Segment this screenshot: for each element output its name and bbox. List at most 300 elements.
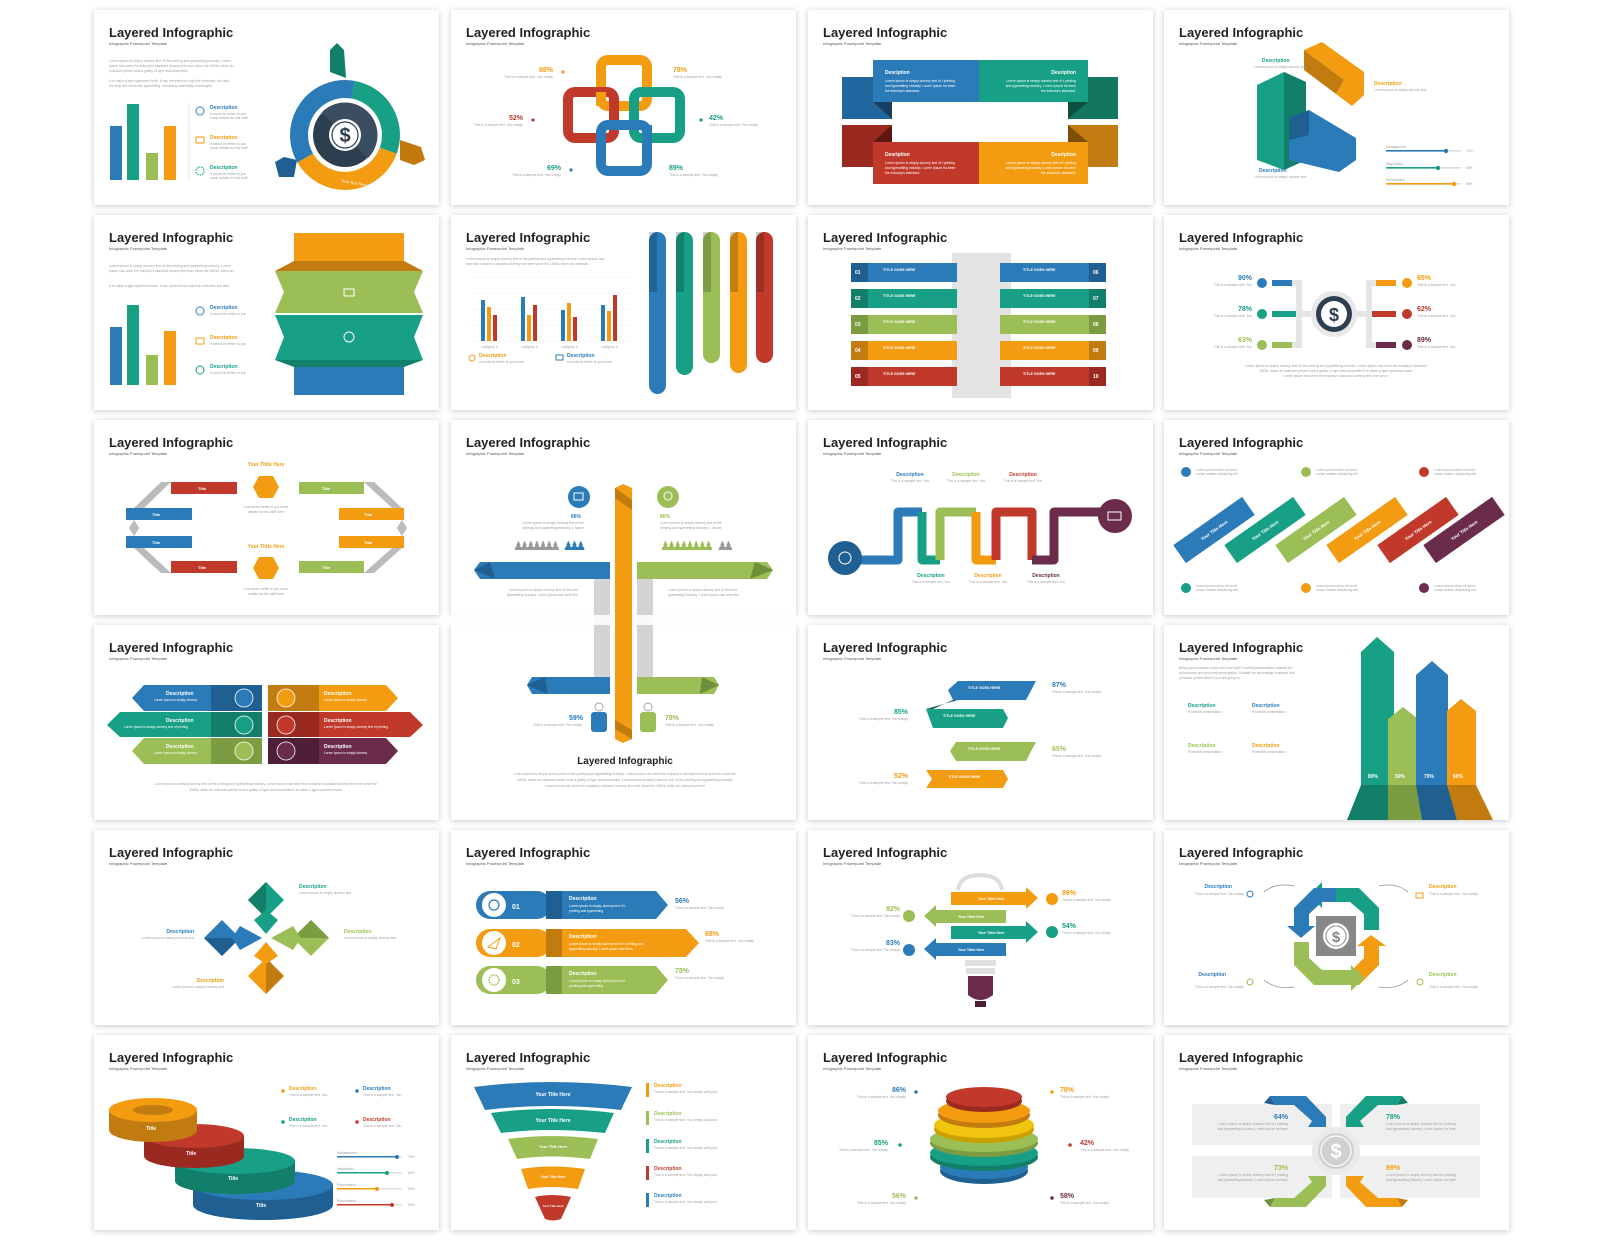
slide 16: vertical arrows: all business and personal presentation. Suitable for all strategic business and xyxy=(1179,671,1295,675)
progress bars: 70% xyxy=(408,1155,415,1159)
slide 24: four corner arrows xyxy=(1164,1035,1509,1230)
slide 13: opposing arrows: Description xyxy=(166,718,194,724)
slide 3: folded banners: the industry's standard. xyxy=(1041,89,1076,93)
slide 2: interlocking squares xyxy=(451,10,796,205)
slide 13: opposing arrows: Lorem Ipsum is simply dummy xyxy=(324,698,367,702)
slide 18: numbered bands: Lorem Ipsum is simply dummy text of t xyxy=(569,979,625,983)
slide 18: numbered bands: Layered Infographic xyxy=(466,845,590,860)
slide 11: wave ribbon: Description xyxy=(952,472,980,478)
slide 18: numbered bands: 02 xyxy=(512,942,520,949)
cross ribbons graphic spanning two slides: printing and typesetting industry. L Ipsum xyxy=(660,526,722,530)
slide 9: hexagon flow: Your Tittle Here xyxy=(248,544,285,550)
slide 17: diamond arrows xyxy=(94,830,439,1025)
slide 10: cross ribbons (top part): Infographic Powerpoint Template xyxy=(466,451,524,456)
slide 8: dollar connectors: Infographic Powerpoint Template xyxy=(1179,246,1237,251)
cross ribbons graphic spanning two slides: Lorem ipsum is simply dummy text of the printing and typesetting industry. Lorem Ipsum has been the industry's standard dummy text ever since the xyxy=(514,772,736,776)
slide 11: wave ribbon xyxy=(808,420,1153,615)
slide 23: stacked ellipses: Layered Infographic xyxy=(823,1050,947,1065)
slide 17: diamond arrows: Lorem Ipsum is simply dummy text xyxy=(299,891,351,895)
cross ribbons graphic spanning two slides: 66% xyxy=(571,514,582,520)
arrows: 70% xyxy=(1424,774,1435,780)
percentages: 69% xyxy=(547,165,562,172)
slide 18: numbered bands: Description xyxy=(569,934,597,940)
right rows: 10 xyxy=(1093,374,1099,380)
cross ribbons graphic spanning two slides: 86% xyxy=(660,514,671,520)
slide 19: bulb arrows: 54% xyxy=(1062,923,1077,930)
slide 11: wave ribbon: Description xyxy=(1009,472,1037,478)
cross ribbons graphic spanning two slides: typesetting industry. Lorem Ipsum has been the xyxy=(507,593,578,597)
slide 18: numbered bands: Lorem Ipsum is simply dummy text of t printing and xyxy=(569,942,644,946)
bar chart: Category 3 xyxy=(561,345,578,349)
slide 9: hexagon flow: Title xyxy=(152,540,161,545)
slide 12: diagonal bars xyxy=(1164,420,1509,615)
percentages: 42% xyxy=(709,115,724,122)
percentages: This is a sample text. You simply xyxy=(669,173,718,177)
slide 12: diagonal bars: Your Title Here xyxy=(1302,519,1331,542)
slide 24: four corner arrows: Lorem Ipsum is simply dummy text of t printing xyxy=(1386,1122,1456,1126)
slide 22: funnel: Your Title Here xyxy=(541,1175,565,1179)
slide 20: square cycle: Infographic Powerpoint Template xyxy=(1179,861,1237,866)
slide 9: hexagon flow: It would be better to put some xyxy=(244,587,288,591)
slide 21: stacked discs: Title xyxy=(146,1126,156,1132)
slide 3: folded banners: Lorem Ipsum is simply dummy text of t printing xyxy=(1006,79,1076,83)
slide 19: bulb arrows: This is a sample text. You simply xyxy=(1062,931,1111,935)
slide 24: four corner arrows: and typesetting industry. Lorem Ipsum ha been xyxy=(1218,1178,1288,1182)
slide 11: wave ribbon: Infographic Powerpoint Template xyxy=(823,451,881,456)
slide 8: dollar connectors: 1500s, when an unknown printer took a galley of type and scrambled it to make a type specimen book. xyxy=(1259,369,1413,373)
slide 24: four corner arrows: Infographic Powerpoint Template xyxy=(1179,1066,1237,1071)
layered stack xyxy=(275,233,423,395)
slide 19: bulb arrows: Your Tittle Here xyxy=(978,931,1004,935)
cross ribbons graphic spanning two slides: Lorem Ipsum is simply dummy text of the xyxy=(522,521,584,525)
slide 20: square cycle: Description xyxy=(1198,972,1226,978)
slide 20: square cycle: Description xyxy=(1204,884,1232,890)
cross ribbons graphic spanning two slides: Lorem Ipsum is simply dummy text of the print xyxy=(668,588,737,592)
arrows: 50% xyxy=(1395,774,1406,780)
slide 9: hexagon flow: Your Tittle Here xyxy=(248,462,285,468)
descriptions: Description xyxy=(210,105,238,111)
slide 21: stacked discs: Description xyxy=(289,1117,317,1123)
percentages: 89% xyxy=(669,165,684,172)
slide 5: stacked layers: Ipsum has been the industry's standard dummy text ever since the 1500s, when an xyxy=(109,269,234,273)
slide 22: funnel: Your Title Here xyxy=(535,1118,571,1124)
progress bars: 60% xyxy=(408,1171,415,1175)
slide 7: title rows: Infographic Powerpoint Template xyxy=(823,246,881,251)
ring chart: $ xyxy=(339,125,351,147)
slide 24: four corner arrows: and typesetting industry. Lorem Ipsum ha been xyxy=(1218,1127,1288,1131)
slide 12: diagonal bars: Lorem ipsum dolor sit amet, xyxy=(1196,468,1238,472)
slide 13: opposing arrows: Description xyxy=(324,744,352,750)
slide 19: bulb arrows: Your Tittle Here xyxy=(958,948,984,952)
slide 17: diamond arrows: Description xyxy=(166,929,194,935)
left rows: 04 xyxy=(855,348,861,354)
slide 21: stacked discs: Title xyxy=(256,1203,266,1209)
slide 5: stacked layers: Description xyxy=(210,364,238,370)
slide 19: bulb arrows: Your Tittle Here xyxy=(958,915,984,919)
slide 21: stacked discs: Layered Infographic xyxy=(109,1050,233,1065)
progress bars xyxy=(337,1151,415,1207)
progress bars: 90% xyxy=(408,1203,415,1207)
slide 18: numbered bands: Description xyxy=(569,971,597,977)
slide 5: stacked layers: Lorem Ipsum is simply dummy text of the printing and typesetting industry. Lorem xyxy=(109,264,231,268)
slide 13: opposing arrows: Lorem Ipsum is simply dummy xyxy=(154,698,197,702)
slide 3: folded banners: the industry's standard. xyxy=(1041,171,1076,175)
percentages: This is a sample text. You simply xyxy=(709,123,758,127)
right rows: TITLE GOES HERE xyxy=(1023,346,1056,350)
slide 13: opposing arrows: Description xyxy=(166,744,194,750)
slide 8: dollar connectors: 90% xyxy=(1238,275,1253,282)
slide 21: stacked discs: This is a sample text. You xyxy=(289,1093,328,1097)
left rows: 03 xyxy=(855,322,861,328)
slide 18: numbered bands: 03 xyxy=(512,979,520,986)
slide 7: title rows: Layered Infographic xyxy=(823,230,947,245)
slide 8: dollar connectors: Lorem Ipsum has been the industry's standard dummy text ever since. xyxy=(1283,374,1389,378)
slide 20: square cycle: This is a sample text. You simply xyxy=(1195,985,1244,989)
cross ribbons graphic spanning two slides: 78% xyxy=(665,715,680,722)
ring chart xyxy=(275,43,425,188)
slide 21: stacked discs: Title xyxy=(228,1176,238,1182)
slide 15: stair ribbons: Layered Infographic xyxy=(823,640,947,655)
slide 12: diagonal bars: Lorem ipsum dolor sit amet, xyxy=(1316,584,1358,588)
slide 11: wave ribbon: Description xyxy=(896,472,924,478)
descriptions: It would be better to put xyxy=(210,142,245,146)
slide 8: dollar connectors: $ xyxy=(1329,305,1339,325)
slide 9: hexagon flow: Title xyxy=(322,486,331,491)
bar chart xyxy=(110,104,176,180)
slide 11: wave ribbon: Description xyxy=(974,573,1002,579)
slide 23: stacked ellipses: 58% xyxy=(1060,1193,1075,1200)
slide 16: vertical arrows: Description xyxy=(1188,743,1216,749)
cross ribbons graphic spanning two slides: ♟♟♟ xyxy=(563,539,584,553)
slide 22: funnel: Your Title Here xyxy=(542,1204,564,1208)
slide 12: diagonal bars: Your Title Here xyxy=(1251,519,1280,542)
progress bars: Presentation xyxy=(337,1183,356,1187)
slide 11: wave ribbon: This is a sample text. You xyxy=(1004,479,1042,483)
slide 11: wave ribbon: This is a sample text. You xyxy=(891,479,929,483)
slide 5: stacked layers: Infographic Powerpoint Template xyxy=(109,246,167,251)
slide 8: dollar connectors: Lorem ipsum is simply dummy text of the printing and typesetting industry. Lorem Ipsum has been the industry's standard xyxy=(1245,364,1427,368)
slide 19: bulb arrows: 83% xyxy=(886,940,901,947)
slide 16: vertical arrows xyxy=(1164,625,1509,820)
slide 13: opposing arrows: Lorem Ipsum is simply dummy text of printing xyxy=(124,725,188,729)
cross ribbons graphic spanning two slides: typesetting industry. Lorem Ipsum has been the xyxy=(668,593,739,597)
slide 6: chart + vertical pills: been the industry's standard dummy text ever since the 1500s, when an unknown. xyxy=(466,262,589,266)
descriptions: It would be better to put xyxy=(210,172,245,176)
slide 22: funnel: Description xyxy=(654,1111,682,1117)
slide 22: funnel xyxy=(451,1035,796,1230)
slide 23: stacked ellipses: This is a sample text. You simply xyxy=(1060,1095,1109,1099)
progress bars: Presentation xyxy=(337,1199,356,1203)
cross ribbons graphic spanning two slides: Lorem Ipsum is simply dummy text of the xyxy=(660,521,722,525)
slide 9: hexagon flow: Title xyxy=(198,565,207,570)
slide 19: bulb arrows: Your Tittle Here xyxy=(978,897,1004,901)
slide 18: numbered bands: printing and typesetting xyxy=(569,909,603,913)
slide 22: funnel: This is a sample text. You simply add your xyxy=(654,1146,718,1150)
slide 4: 3D arrows with progress: Description xyxy=(1374,81,1402,87)
slide 18: numbered bands: 78% xyxy=(675,968,690,975)
bar chart: Category 2 xyxy=(521,345,538,349)
slide 19: bulb arrows: This is a sample text. You simply xyxy=(1062,898,1111,902)
slide 8: dollar connectors: This is a sample text. You xyxy=(1417,345,1456,349)
slide 1: circular dollar xyxy=(94,10,439,205)
slide 22: funnel: This is a sample text. You simply add your xyxy=(654,1090,718,1094)
slide 5: stacked layers: It would be better to put xyxy=(210,371,245,375)
slide 13: opposing arrows: Infographic Powerpoint Template xyxy=(109,656,167,661)
cross ribbons graphic spanning two slides: This is a sample text. You simply xyxy=(533,723,582,727)
slide 23: stacked ellipses: Infographic Powerpoint Template xyxy=(823,1066,881,1071)
slide 20: square cycle: Description xyxy=(1429,972,1457,978)
slide 5: stacked layers: Description xyxy=(210,305,238,311)
slide 8: dollar connectors: 63% xyxy=(1238,337,1253,344)
left rows: TITLE GOES HERE xyxy=(883,268,916,272)
cross ribbons graphic spanning two slides: ♟♟♟♟♟♟♟ xyxy=(513,539,559,553)
slide 6: chart + vertical pills: Layered Infographic xyxy=(466,230,590,245)
slide 3: folded banners: and typesetting industry. Lorem Ipsum ha been xyxy=(1006,84,1076,88)
slide 23: stacked ellipses: This is a sample text. You simply xyxy=(1060,1201,1109,1205)
right rows: 08 xyxy=(1093,322,1099,328)
slide 15: stair ribbons: Infographic Powerpoint Template xyxy=(823,656,881,661)
slide 1: circular dollar: unknown printer took a galley of type and scrambled. xyxy=(109,69,188,73)
slide 19: bulb arrows: This is a sample text. You simply xyxy=(851,948,900,952)
cross ribbons graphic spanning two slides: 1500s, when an unknown printer took a galley of type and scrambled. Lorem ipsum is simply dummy text of the printing and typesetting industry. xyxy=(517,778,733,782)
slide 3: folded banners xyxy=(808,10,1153,205)
progress bars: Negotiation xyxy=(337,1167,354,1171)
slide 9: hexagon flow: details for this stuff here xyxy=(248,510,284,514)
slide 10: cross ribbons (top part): Layered Infographic xyxy=(466,435,590,450)
slide 24: four corner arrows: Lorem Ipsum is simply dummy text of t printing xyxy=(1218,1122,1288,1126)
bar chart: Category 4 xyxy=(601,345,618,349)
slide 11: wave ribbon: Description xyxy=(917,573,945,579)
slide 23: stacked ellipses xyxy=(808,1035,1153,1230)
slide 23: stacked ellipses: 56% xyxy=(892,1193,907,1200)
progress bars: Presentation xyxy=(1386,178,1405,182)
cross ribbons graphic spanning two slides: ♟♟ xyxy=(717,539,732,553)
slide 24: four corner arrows: 64% xyxy=(1274,1114,1289,1121)
left rows: 01 xyxy=(855,270,861,276)
left rows: TITLE GOES HERE xyxy=(883,346,916,350)
slide 3: folded banners: the industry's standard. xyxy=(885,171,920,175)
slide 18: numbered bands: This is a sample text. You simply xyxy=(675,976,724,980)
slide 24: four corner arrows: 78% xyxy=(1386,1114,1401,1121)
cross ribbons graphic spanning two slides: Layered Infographic xyxy=(577,756,673,767)
slide 17: diamond arrows: Infographic Powerpoint Template xyxy=(109,861,167,866)
slide 18: numbered bands: Description xyxy=(569,896,597,902)
slide 8: dollar connectors: This is a sample text. You xyxy=(1417,283,1456,287)
cross ribbons graphic spanning two slides: printing and typesetting industry. L Ipsum xyxy=(523,526,584,530)
progress bars: 70% xyxy=(1466,149,1473,153)
progress bars: 90% xyxy=(1466,182,1473,186)
slide 22: funnel: Description xyxy=(654,1193,682,1199)
slide 8: dollar connectors: This is a sample text. You xyxy=(1214,283,1252,287)
slide 20: square cycle xyxy=(1164,830,1509,1025)
slide 22: funnel: Infographic Powerpoint Template xyxy=(466,1066,524,1071)
slide 12: diagonal bars: Your Title Here xyxy=(1353,519,1382,542)
slide 16: vertical arrows: Bring your business to the next level with Powerful presentation material for xyxy=(1179,666,1293,670)
slide 23: stacked ellipses: This is a sample text. You simply xyxy=(839,1148,888,1152)
slide 1: circular dollar: It to make a type specimen book. It has survived not only five centuries, but also xyxy=(109,79,229,83)
slide 20: square cycle: This is a sample text. You simply xyxy=(1429,985,1478,989)
slide 12: diagonal bars: Lorem ipsum dolor sit amet, xyxy=(1316,468,1358,472)
slide 11: wave ribbon: This is a sample text. You xyxy=(947,479,985,483)
slide 11: wave ribbon: Description xyxy=(1032,573,1060,579)
slide 9: hexagon flow: Title xyxy=(198,486,207,491)
slide 3: folded banners: Infographic Powerpoint Template xyxy=(823,41,881,46)
slide 22: funnel: Description xyxy=(654,1139,682,1145)
slide 15: stair ribbons: This is a sample text. You simply xyxy=(859,781,908,785)
percentages: This is a sample text. You simply xyxy=(673,75,722,79)
slide 8: dollar connectors: 89% xyxy=(1417,337,1432,344)
slide 1: circular dollar: Layered Infographic xyxy=(109,25,233,40)
slide 21: stacked discs: Description xyxy=(289,1086,317,1092)
slide 9: hexagon flow: details for this stuff here xyxy=(248,592,284,596)
slide 6: chart + vertical pills xyxy=(451,215,796,410)
slide 5: stacked layers xyxy=(94,215,439,410)
right rows: 09 xyxy=(1093,348,1099,354)
arrows: 80% xyxy=(1368,774,1379,780)
slide 23: stacked ellipses: This is a sample text. You simply xyxy=(1080,1148,1129,1152)
slide 7: title rows xyxy=(808,215,1153,410)
slide 9: hexagon flow: Title xyxy=(364,512,373,517)
slide 8: dollar connectors xyxy=(1164,215,1509,410)
slide 16: vertical arrows: Description xyxy=(1252,743,1280,749)
slide 13: opposing arrows: 1500s, when an unknown printer took a galley of type and scrambled it to make a type specimen book. xyxy=(189,788,343,792)
slide 1: circular dollar: the leap into electronic typesetting, remaining essentially unchanged. xyxy=(109,84,213,88)
cross ribbons graphic spanning two slides: 59% xyxy=(569,715,584,722)
slide 15: stair ribbons: 85% xyxy=(894,709,909,716)
slide 21: stacked discs: Infographic Powerpoint Template xyxy=(109,1066,167,1071)
slide 18: numbered bands: This is a sample text. You simply xyxy=(705,939,754,943)
slide 18: numbered bands: printing and typesetting xyxy=(569,984,603,988)
slide 22: funnel: Layered Infographic xyxy=(466,1050,590,1065)
left rows: TITLE GOES HERE xyxy=(883,320,916,324)
slide 24: four corner arrows: 73% xyxy=(1274,1165,1289,1172)
slide 5: stacked layers: Layered Infographic xyxy=(109,230,233,245)
right rows: TITLE GOES HERE xyxy=(1023,320,1056,324)
progress bars: 90% xyxy=(408,1187,415,1191)
slide 3: folded banners: Desription xyxy=(885,70,910,76)
slide 20: square cycle: Layered Infographic xyxy=(1179,845,1303,860)
descriptions: Description xyxy=(210,165,238,171)
progress bars: Management xyxy=(337,1151,357,1155)
slide 11: wave ribbon: This is a sample text. You xyxy=(969,580,1007,584)
bar chart: Category 1 xyxy=(481,345,498,349)
slide 22: funnel: This is a sample text. You simply add your xyxy=(654,1200,718,1204)
slide 12: diagonal bars: conse ectetur adipiscing elit. xyxy=(1434,472,1477,476)
slide 21: stacked discs: Description xyxy=(363,1117,391,1123)
descriptions: some details for this stuff. xyxy=(210,116,248,120)
slide 16: vertical arrows: Description xyxy=(1252,703,1280,709)
slide 9: hexagon flow: It would be better to put some xyxy=(244,505,288,509)
slide 4: 3D arrows with progress xyxy=(1164,10,1509,205)
slide 19: bulb arrows: Infographic Powerpoint Template xyxy=(823,861,881,866)
slide 21: stacked discs: This is a sample text. You xyxy=(363,1124,402,1128)
slide 2: interlocking squares: Infographic Powerpoint Template xyxy=(466,41,524,46)
slide 24: four corner arrows: 89% xyxy=(1386,1165,1401,1172)
slide 13: opposing arrows: Description xyxy=(324,718,352,724)
slide 22: funnel: This is a sample text. You simply add your xyxy=(654,1118,718,1122)
slide 1: circular dollar: Infographic Powerpoint Template xyxy=(109,41,167,46)
right rows: TITLE GOES HERE xyxy=(1023,372,1056,376)
percentages: This is a sample text. You simply xyxy=(474,123,523,127)
right rows: 06 xyxy=(1093,270,1099,276)
slide 12: diagonal bars: conse ectetur adipiscing elit. xyxy=(1316,588,1359,592)
slide 21: stacked discs: This is a sample text. You xyxy=(289,1124,328,1128)
slide 3: folded banners: the industry's standard. xyxy=(885,89,920,93)
slide 22: funnel: Description xyxy=(654,1083,682,1089)
slide 4: 3D arrows with progress: Layered Infographic xyxy=(1179,25,1303,40)
cross ribbons graphic spanning two slides: ♟♟♟♟♟♟♟♟ xyxy=(660,539,712,553)
slide 21: stacked discs xyxy=(94,1035,439,1230)
slide 18: numbered bands xyxy=(451,830,796,1025)
slide 22: funnel: Description xyxy=(654,1166,682,1172)
slide 19: bulb arrows: Layered Infographic xyxy=(823,845,947,860)
cross ribbons graphic spanning two slides: This is a sample text. You simply xyxy=(665,723,714,727)
slide 18: numbered bands: typesetting industry. Lorem Ipsum has been xyxy=(569,947,633,951)
slide 17: diamond arrows: Description xyxy=(196,978,224,984)
arrows xyxy=(1347,637,1493,820)
left rows: TITLE GOES HERE xyxy=(883,294,916,298)
slide 15: stair ribbons: This is a sample text. You simply xyxy=(1052,754,1101,758)
slide 9: hexagon flow: Layered Infographic xyxy=(109,435,233,450)
slide 8: dollar connectors: 78% xyxy=(1238,306,1253,313)
descriptions: some details for this stuff. xyxy=(210,176,248,180)
slide 11: wave ribbon: This is a sample text. You xyxy=(1027,580,1065,584)
bar chart xyxy=(471,277,631,349)
slide 12: diagonal bars: conse ectetur adipiscing elit. xyxy=(1196,472,1239,476)
slide 13: opposing arrows: Lorem Ipsum is simply dummy xyxy=(324,751,367,755)
slide 21: stacked discs: This is a sample text. You xyxy=(363,1093,402,1097)
slide 20: square cycle: Description xyxy=(1429,884,1457,890)
slide 3: folded banners: Lorem Ipsum is simply dummy text of t printing xyxy=(885,161,955,165)
slide 12: diagonal bars: conse ectetur adipiscing elit. xyxy=(1434,588,1477,592)
slide 6: chart + vertical pills: Infographic Powerpoint Template xyxy=(466,246,524,251)
slide 18: numbered bands: This is a sample text. You simply xyxy=(675,906,724,910)
right rows: 07 xyxy=(1093,296,1099,302)
progress bars: Management xyxy=(1386,145,1406,149)
slide 19: bulb arrows: 86% xyxy=(1062,890,1077,897)
slide 23: stacked ellipses: 78% xyxy=(1060,1087,1075,1094)
slide 8: dollar connectors: 62% xyxy=(1417,306,1432,313)
slide 3: folded banners: and typesetting industry. Lorem Ipsum ha been xyxy=(885,84,956,88)
slide 10: cross ribbons (top part) xyxy=(451,420,796,615)
slide 24: four corner arrows: and typesetting industry. Lorem Ipsum ha been xyxy=(1386,1178,1457,1182)
slide 24: four corner arrows: Lorem Ipsum is simply dummy text of t printing xyxy=(1386,1173,1456,1177)
slide 12: diagonal bars: Infographic Powerpoint Template xyxy=(1179,451,1237,456)
progress bars: Negotiation xyxy=(1386,162,1403,166)
slide 15: stair ribbons: TITLE GOES HERE xyxy=(968,686,1001,690)
slide 15: stair ribbons: TITLE GOES HERE xyxy=(948,775,981,779)
percentages: 52% xyxy=(509,115,524,122)
slide 13: opposing arrows: Description xyxy=(166,691,194,697)
slide 12: diagonal bars: Your Title Here xyxy=(1200,519,1229,542)
slide 23: stacked ellipses: 85% xyxy=(874,1140,889,1147)
slide 12: diagonal bars: Lorem ipsum dolor sit amet, xyxy=(1196,584,1238,588)
slide 6: chart + vertical pills: It would be better to put some xyxy=(479,360,524,364)
slide 3: folded banners: Desription xyxy=(1051,70,1076,76)
slide 5: stacked layers: It to make a type specimen book. It has survived not only five centuries, but also xyxy=(109,284,229,288)
percentages: This is a sample text. You simply xyxy=(504,75,553,79)
slide 15: stair ribbons: 52% xyxy=(894,773,909,780)
slide 20: square cycle: This is a sample text. You simply xyxy=(1429,892,1478,896)
slide 15: stair ribbons: TITLE GOES HERE xyxy=(943,714,976,718)
slide 21: stacked discs: Title xyxy=(186,1151,196,1157)
left rows xyxy=(851,263,957,386)
slide 15: stair ribbons: This is a sample text. You simply xyxy=(859,717,908,721)
slide 12: diagonal bars: conse ectetur adipiscing elit. xyxy=(1316,472,1359,476)
slide 3: folded banners: Layered Infographic xyxy=(823,25,947,40)
slide 3: folded banners: and typesetting industry. Lorem Ipsum ha been xyxy=(885,166,956,170)
slide 4: 3D arrows with progress: Infographic Powerpoint Template xyxy=(1179,41,1237,46)
